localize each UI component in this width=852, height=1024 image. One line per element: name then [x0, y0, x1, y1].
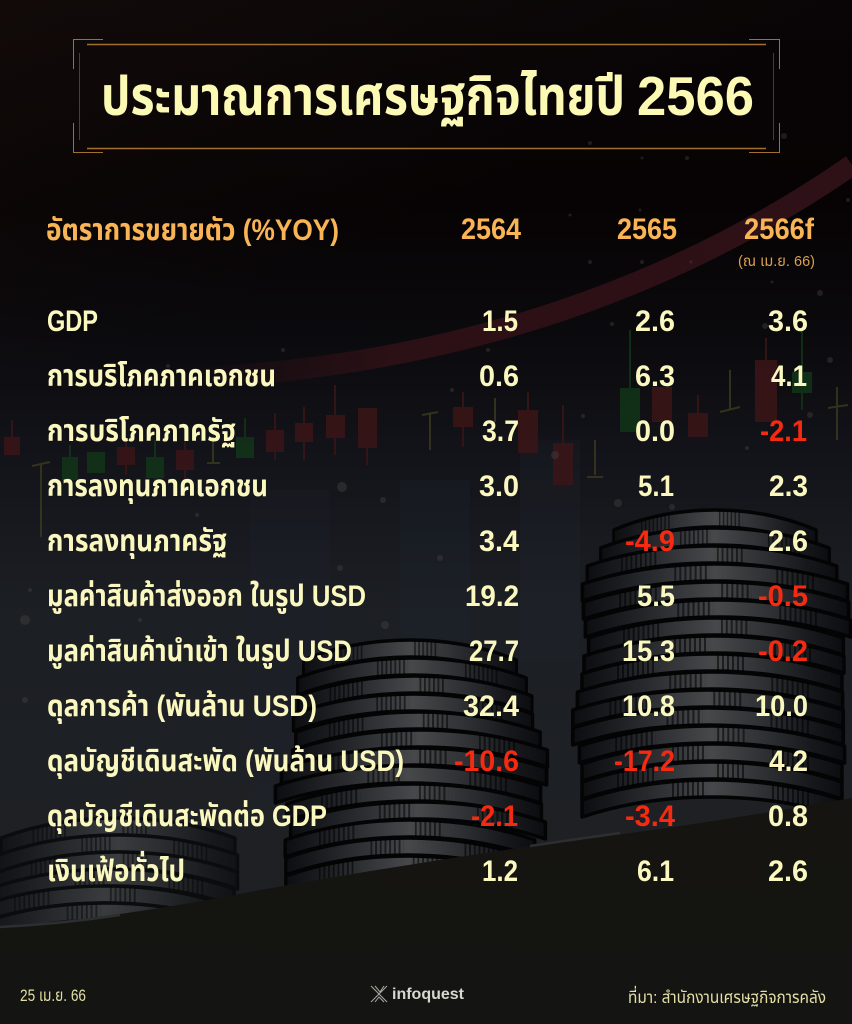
- row: private consumption: การบริโภคภาคเอกชน: [47, 360, 276, 393]
- row: private consumption: 4.1: [771, 360, 807, 393]
- illustration: middle coin stack: [275, 638, 547, 914]
- title: year: 2566: [637, 65, 754, 127]
- row: government consumption: [47, 415, 807, 448]
- row: trade balance: 10.0: [755, 690, 808, 723]
- illustration: dark wooden ground: [0, 798, 852, 1024]
- logo wordmark: infoquest: [392, 986, 465, 1003]
- row: government consumption: -2.1: [760, 415, 807, 448]
- icon: X mark: [371, 986, 387, 1002]
- row: government investment: 2.6: [768, 525, 808, 558]
- row: GDP: 3.6: [768, 305, 808, 338]
- footer logo: infoquest: [371, 986, 465, 1003]
- row: private investment: [47, 470, 808, 504]
- header: growth rate label: อัตราการขยายตัว (%YOY): [46, 214, 339, 247]
- footer source: ที่มา: สำนักงานเศรษฐกิจการคลัง: [628, 985, 826, 1007]
- row: import value: มูลค่าสินค้านำเข้า ในรูป USD: [47, 635, 352, 669]
- row: GDP: GDP: [47, 305, 98, 338]
- chart: candlesticks: [4, 330, 848, 537]
- row: import value: 15.3: [622, 635, 675, 668]
- row: GDP: 2.6: [635, 305, 675, 338]
- row: trade balance: 10.8: [622, 690, 675, 723]
- row: current account: 4.2: [769, 745, 808, 778]
- decorative sparkles: [20, 133, 850, 703]
- row: export value: มูลค่าสินค้าส่งออก ในรูป USD: [47, 580, 366, 614]
- row: current account: -10.6: [454, 745, 519, 778]
- row: current account: ดุลบัญชีเดินสะพัด (พันล้าน USD): [47, 745, 404, 779]
- row: private investment: 3.0: [479, 470, 519, 503]
- table header: [46, 213, 815, 270]
- footer date: 25 เม.ย. 66: [20, 986, 86, 1005]
- row: GDP: 1.5: [482, 305, 518, 338]
- row: headline inflation: 6.1: [637, 855, 674, 888]
- row: headline inflation: 2.6: [768, 855, 808, 888]
- row: export value: -0.5: [758, 580, 808, 613]
- row: trade balance: ดุลการค้า (พันล้าน USD): [47, 690, 317, 724]
- row: government consumption: การบริโภคภาครัฐ: [47, 415, 236, 448]
- row: current account: [47, 745, 808, 779]
- row: current account to GDP: 0.8: [768, 800, 808, 833]
- row: private consumption: 6.3: [635, 360, 675, 393]
- header: 2565: 2565: [617, 213, 677, 246]
- row: private investment: การลงทุนภาคเอกชน: [47, 470, 268, 504]
- row: trade balance: [47, 690, 808, 724]
- chart: rising red trend curve: [190, 165, 852, 378]
- row: export value: 5.5: [637, 580, 675, 613]
- row: export value: 19.2: [465, 580, 519, 613]
- row: headline inflation: 1.2: [482, 855, 518, 888]
- illustration: right coin stack: [573, 508, 851, 820]
- row: import value: [47, 635, 808, 669]
- row: GDP: [47, 305, 808, 338]
- row: current account to GDP: ดุลบัญชีเดินสะพัดต่อ GDP: [47, 800, 327, 834]
- row: government consumption: 3.7: [482, 415, 519, 448]
- header note: (ณ เม.ย. 66): [738, 253, 815, 270]
- row: current account to GDP: [47, 800, 808, 834]
- row: export value: [47, 580, 808, 614]
- row: headline inflation: [47, 850, 808, 888]
- row: import value: 27.7: [469, 635, 519, 668]
- title: Thai words: ประมาณการเศรษฐกิจไทยปี: [101, 67, 625, 127]
- row: government investment: -4.9: [625, 525, 675, 558]
- row: current account to GDP: -3.4: [625, 800, 675, 833]
- row: private consumption: 0.6: [479, 360, 519, 393]
- header: 2564: 2564: [461, 213, 521, 246]
- title: [101, 65, 754, 127]
- row: government investment: 3.4: [479, 525, 519, 558]
- row: private investment: 5.1: [638, 470, 674, 503]
- row: current account: -17.2: [614, 745, 675, 778]
- row: private investment: 2.3: [769, 470, 808, 503]
- row: headline inflation: เงินเฟ้อทั่วไป: [47, 850, 185, 888]
- row: trade balance: 32.4: [463, 690, 519, 723]
- title frame: [74, 40, 780, 152]
- row: government consumption: 0.0: [635, 415, 675, 448]
- illustration: left coin stack: [0, 816, 238, 943]
- row: private consumption: [47, 360, 807, 393]
- header: 2566f: 2566f: [744, 213, 815, 246]
- row: current account to GDP: -2.1: [471, 800, 518, 833]
- row: government investment: [47, 525, 808, 559]
- row: import value: -0.2: [758, 635, 808, 668]
- row: government investment: การลงทุนภาครัฐ: [47, 525, 227, 559]
